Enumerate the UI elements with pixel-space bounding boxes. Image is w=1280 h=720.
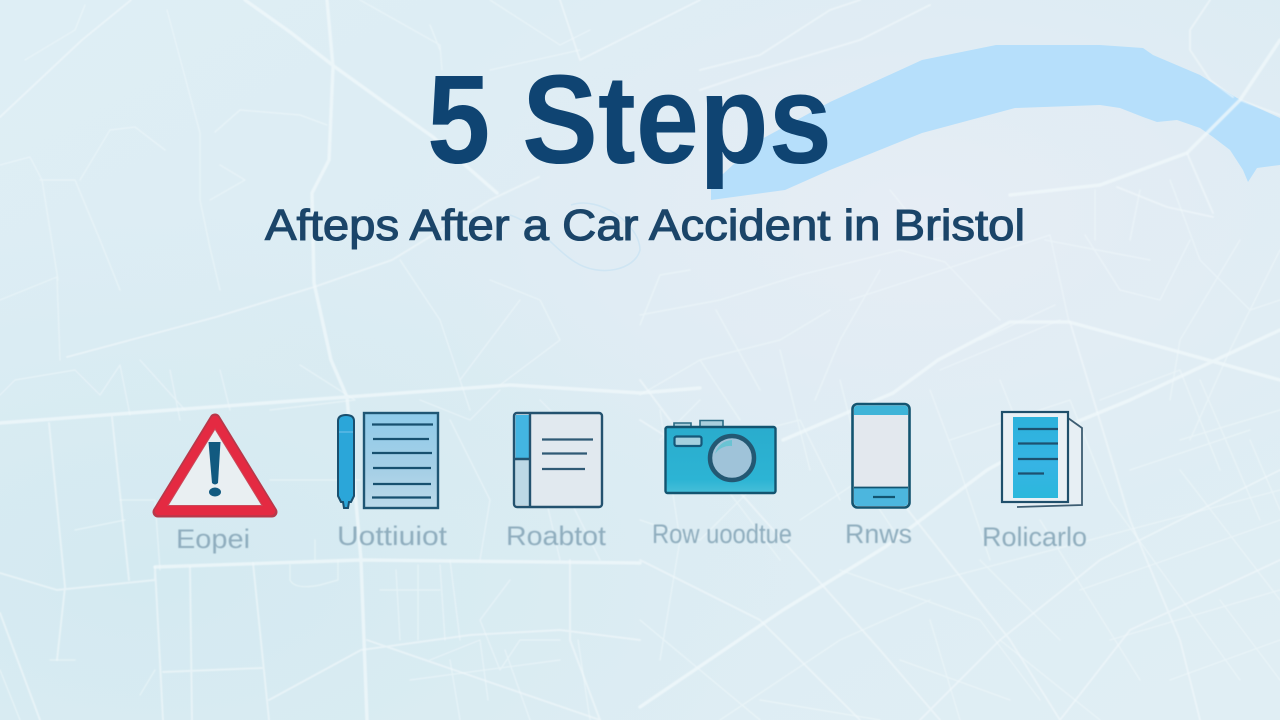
- icon: smartphone: [852, 404, 910, 508]
- title: 5 Steps: [427, 49, 832, 190]
- icon: camera: [666, 420, 776, 493]
- icon: book: [514, 413, 602, 507]
- notepad sheet: [364, 413, 438, 508]
- subtitle: Afteps After a Car Accident in Bristol: [265, 201, 1025, 250]
- icon: warning triangle: [158, 419, 272, 512]
- label: step 5: Rnws: [845, 519, 912, 549]
- river: [711, 45, 1280, 200]
- label: step 4: Row uoodtue: [652, 519, 792, 549]
- label: step 1: Eopei: [176, 524, 250, 554]
- icon: documents: [1002, 412, 1082, 507]
- label: step 2: Uottiuiot: [337, 521, 448, 551]
- icon: notepad and pen: [338, 413, 438, 508]
- label: step 3: Roabtot: [506, 521, 607, 551]
- label: step 6: Rolicarlo: [982, 522, 1087, 552]
- pen: [338, 415, 354, 508]
- small pond loop: [510, 203, 640, 271]
